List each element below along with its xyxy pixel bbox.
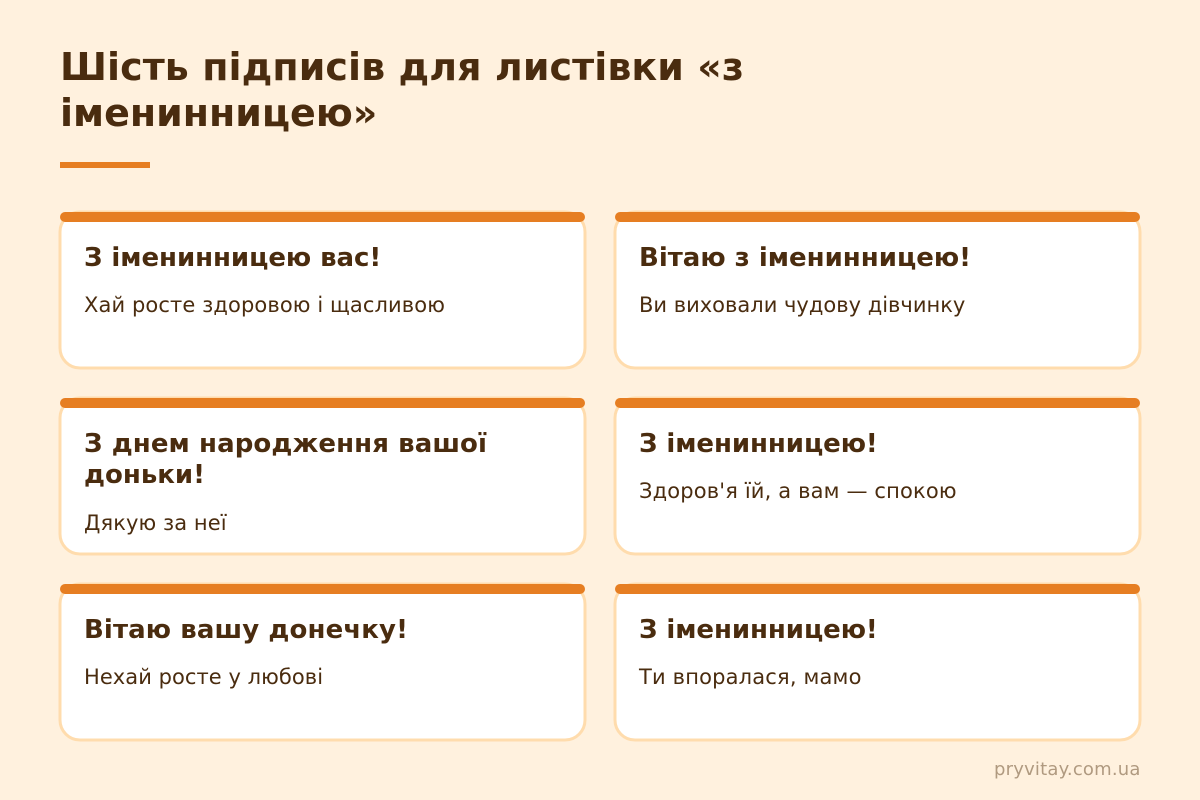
- card heading: Вітаю з іменинницею!: [639, 243, 971, 273]
- title: [60, 45, 744, 135]
- card heading: З днем народження вашої: [84, 429, 487, 459]
- footer source: pryvitay.com.ua: [994, 759, 1141, 780]
- card top bar: [60, 398, 585, 408]
- card: greeting 3: [60, 398, 585, 554]
- card top bar: [615, 212, 1140, 222]
- card heading: доньки!: [84, 460, 205, 490]
- card text: Ти впоралася, мамо: [638, 665, 862, 689]
- card text: Нехай росте у любові: [84, 665, 323, 689]
- card heading: Вітаю вашу донечку!: [84, 615, 408, 645]
- card heading: [84, 429, 487, 490]
- card text: Хай росте здоровою і щасливою: [84, 293, 445, 317]
- card heading: З іменинницею вас!: [84, 243, 381, 273]
- card: greeting 6: [615, 584, 1140, 740]
- card heading: З іменинницею!: [639, 429, 878, 459]
- card: greeting 2: [615, 212, 1140, 368]
- card text: Дякую за неї: [84, 511, 227, 535]
- title: іменинницею»: [60, 91, 377, 135]
- card: greeting 5: [60, 584, 585, 740]
- card: greeting 4: [615, 398, 1140, 554]
- card top bar: [60, 212, 585, 222]
- card top bar: [615, 584, 1140, 594]
- card top bar: [60, 584, 585, 594]
- title: Шість підписів для листівки «з: [60, 45, 744, 89]
- card text: Ви виховали чудову дівчинку: [639, 293, 965, 317]
- title accent rule: [60, 162, 150, 168]
- card: greeting 1: [60, 212, 585, 368]
- card top bar: [615, 398, 1140, 408]
- card heading: З іменинницею!: [639, 615, 878, 645]
- card text: Здоров'я їй, а вам — спокою: [639, 479, 957, 503]
